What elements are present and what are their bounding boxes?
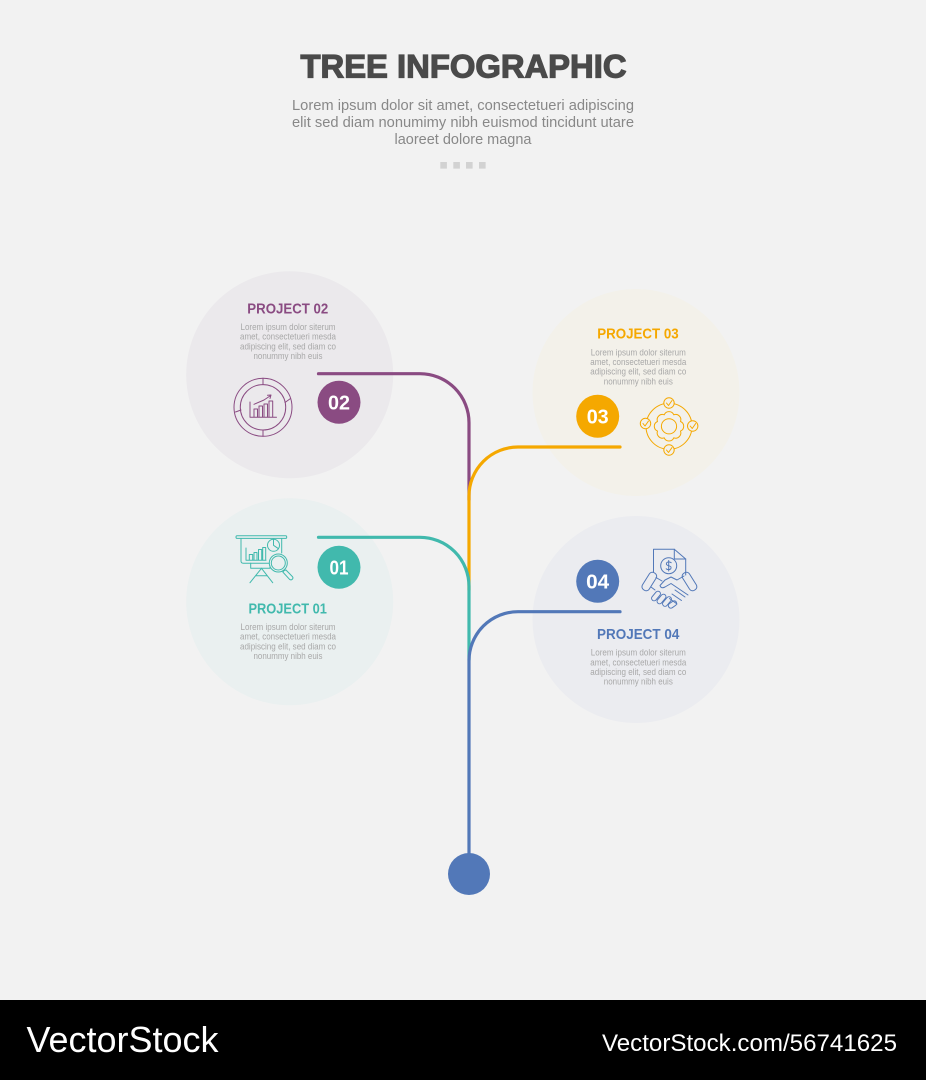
text block: project 04: nonummy nibh euis [604, 677, 673, 687]
text block: project 04: adipiscing elit, sed diam co [590, 667, 686, 677]
text block: project 02 [240, 322, 336, 361]
panel: project 04 circle [532, 516, 740, 723]
heading: project 01: PROJECT 01 [248, 601, 327, 617]
title: TREE INFOGRAPHIC [300, 48, 626, 84]
text block: project 02: nonummy nibh euis [254, 351, 323, 361]
tree trunk and branch: project 04 [469, 612, 620, 874]
text block: project 02: amet, consectetueri mesda [240, 332, 336, 342]
tree branch: project 02 [318, 374, 469, 500]
number 01: 01 [330, 557, 348, 579]
text block: project 03 [590, 347, 686, 386]
pagination dots [440, 162, 486, 169]
text block: project 02: adipiscing elit, sed diam co [240, 341, 336, 351]
text block: project 01: amet, consectetueri mesda [240, 632, 336, 642]
icon: growth chart in ring [234, 378, 292, 436]
tree branch: project 01 [318, 537, 469, 660]
number badge 01 [318, 546, 360, 589]
text block: project 01: adipiscing elit, sed diam co [240, 641, 336, 651]
text block: project 03: Lorem ipsum dolor siterum [591, 347, 686, 357]
subtitle text block [292, 98, 634, 148]
number badge 02 [318, 381, 360, 424]
project 01 content [236, 536, 360, 661]
text block: project 04 [590, 648, 686, 687]
number badge 03 [576, 395, 619, 438]
text block: project 01 [240, 622, 336, 661]
panel: project 03 circle [532, 289, 740, 496]
text block: project 04: Lorem ipsum dolor siterum [591, 648, 686, 658]
icon: contract and handshake [641, 549, 698, 609]
icon: presentation board with magnifier [236, 536, 293, 583]
number 04: 04 [586, 571, 610, 593]
heading: project 02: PROJECT 02 [247, 301, 328, 317]
subtitle text block: elit sed diam nonumimy nibh euismod tincidunt utare [292, 115, 634, 131]
icon: gear with check marks [640, 398, 698, 455]
project 02 content [234, 301, 360, 436]
text block: project 04: amet, consectetueri mesda [590, 657, 686, 667]
number 02: 02 [328, 392, 350, 414]
text block: project 03: amet, consectetueri mesda [590, 357, 686, 367]
heading: project 03: PROJECT 03 [597, 326, 679, 342]
panel: project 01 circle [186, 498, 393, 705]
text block: project 01: Lorem ipsum dolor siterum [240, 622, 336, 632]
footer brand: VectorStock [26, 1019, 219, 1060]
subtitle text block: Lorem ipsum dolor sit amet, consectetueri adipiscing [292, 98, 634, 114]
panel: project 02 circle [186, 271, 393, 478]
heading: project 04: PROJECT 04 [597, 627, 680, 643]
tree branch: project 03 [469, 447, 620, 590]
subtitle text block: laoreet dolore magna [394, 132, 532, 148]
footer url: VectorStock.com/56741625 [602, 1030, 897, 1057]
text block: project 02: Lorem ipsum dolor siterum [240, 322, 336, 332]
number badge 04 [576, 560, 619, 603]
text block: project 03: nonummy nibh euis [604, 376, 673, 386]
footer bar [0, 1000, 926, 1080]
text block: project 01: nonummy nibh euis [254, 651, 323, 661]
project 04 content [576, 549, 698, 687]
tree root node [448, 853, 490, 895]
project 03 content [576, 326, 698, 455]
text block: project 03: adipiscing elit, sed diam co [590, 367, 686, 377]
number 03: 03 [587, 406, 609, 428]
